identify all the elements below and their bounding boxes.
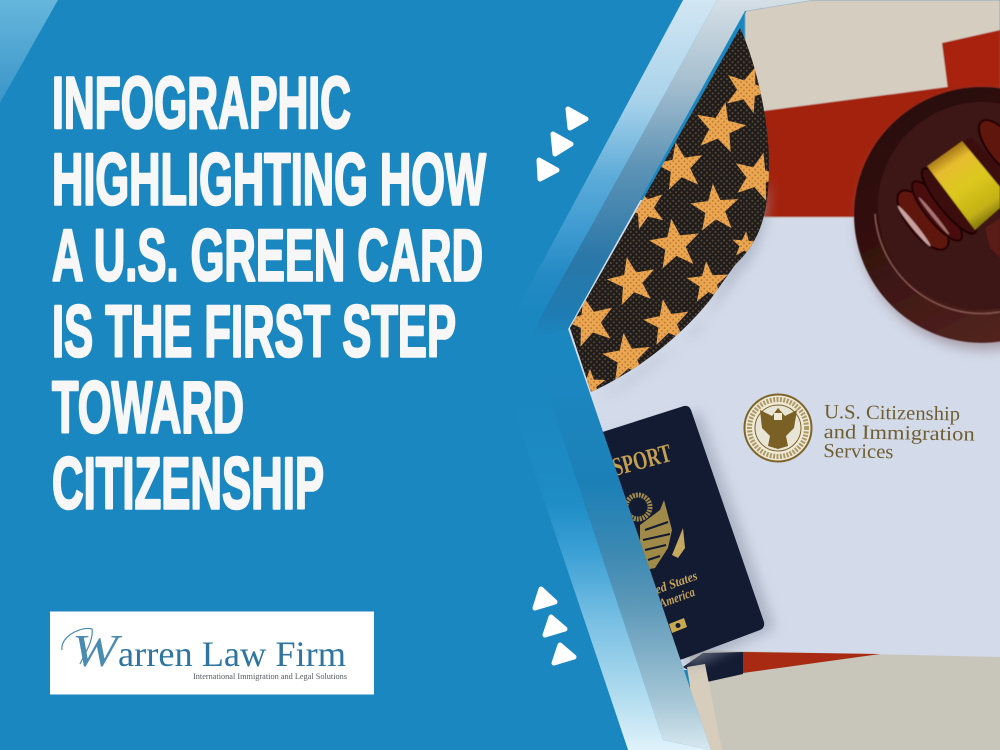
passport shadow [682,410,777,670]
upper light band [494,0,717,352]
passport [603,406,764,660]
passport chip symbol [669,618,687,633]
title: INFOGRAPHIC [52,63,351,144]
logo script initial: W [72,625,122,676]
title: A U.S. GREEN CARD [52,216,483,296]
logo tagline: International Immigration and Legal Solutions [193,672,347,681]
gavel [896,119,1000,258]
paper letterhead [560,200,1000,670]
title: TOWARD [52,368,244,448]
arrows: top group [539,109,586,179]
passport country text: ed States [653,568,699,597]
logo wordmark: arren Law Firm [118,634,346,674]
flag top [745,0,1000,218]
passport title: SPORT [609,438,675,482]
gavel sound block [854,87,1000,350]
mask shadow [626,182,776,382]
arrows: bottom group [535,589,574,663]
solid blue panel edge [0,0,683,750]
stars on mask [572,68,769,392]
flag bottom [683,650,1000,750]
logo: Warren Law Firm [50,612,374,694]
logo script swash [62,628,92,664]
lower grey-blue band [530,329,711,750]
USCIS wordmark [824,404,974,458]
title: HIGHLIGHTING HOW [52,140,486,220]
upper grey-blue band [530,0,812,340]
title: CITIZENSHIP [52,444,324,524]
passport eagle emblem [626,495,685,570]
title: IS THE FIRST STEP [52,292,456,372]
face mask with stars [570,28,770,392]
corner accent [0,0,58,103]
USCIS wordmark: Services [823,440,894,463]
USCIS wordmark: U.S. Citizenship [824,401,960,425]
lower light band [494,340,711,750]
USCIS seal [744,394,812,462]
photo: flag, mask, gavel, passport and USCIS letterhead [559,0,1000,750]
title [52,63,486,524]
passport country text line two: America [656,584,697,611]
USCIS wordmark: and Immigration [824,421,975,446]
